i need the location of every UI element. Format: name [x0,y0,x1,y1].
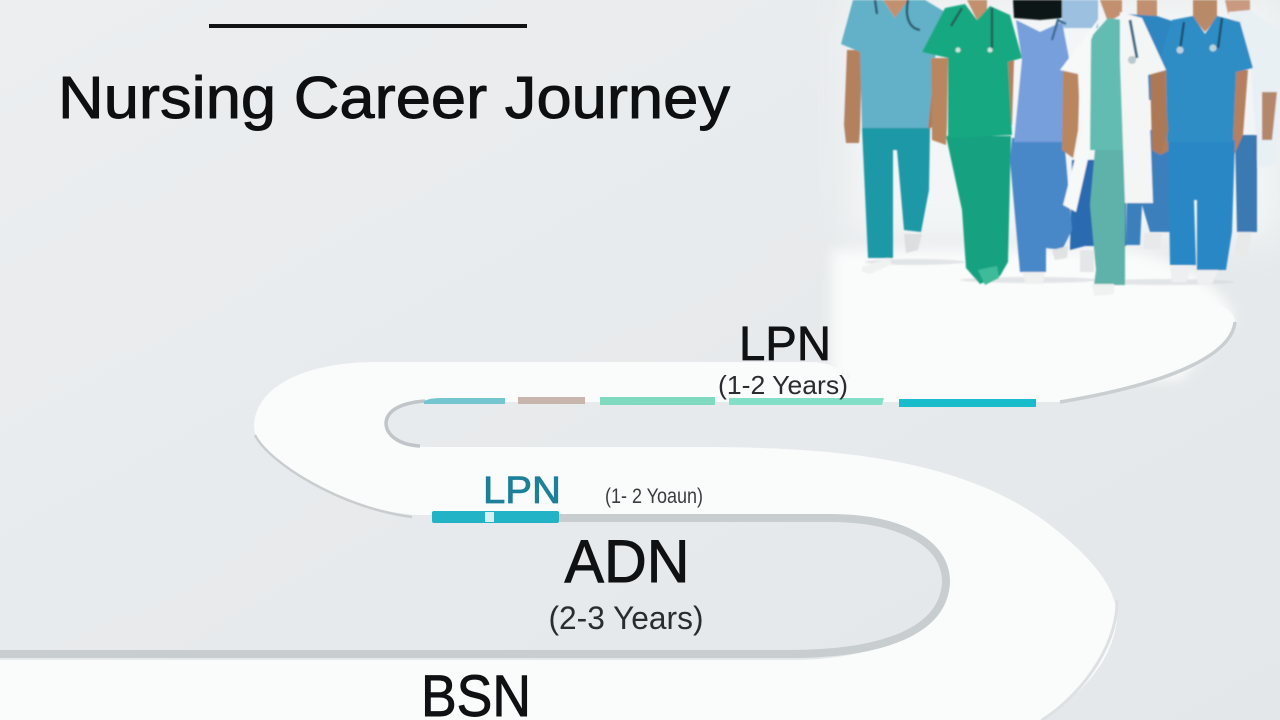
label: ADN years: (2-3 Years) [548,600,704,636]
label: LPN years: (1-2 Years) [718,370,848,400]
label: LPN main: LPN [739,318,831,371]
title: Nursing Career Journey [58,65,731,131]
person: light teal scrubs [841,0,945,274]
road inner edge shadow: upper left bend [386,401,425,446]
top rule [209,24,527,28]
person: blue scrubs front right [1160,0,1253,284]
person: green scrubs [922,0,1022,285]
progress dash: lower track [432,511,559,523]
nursing team illustration [841,0,1280,296]
progress dashes: upper track [424,397,1036,407]
label: LPN teal: LPN [483,470,561,512]
label: small years: (1- 2 Yoaun) [605,485,703,508]
person: back scrubs behind doctor [1062,0,1098,28]
glow behind team [850,0,1280,240]
label: ADN: ADN [564,528,690,595]
person: back right in white coat [1225,0,1280,256]
road inner edge shadow: middle bend [0,518,946,654]
person: back centre in blue [1070,0,1175,272]
road right edge shadow [1042,600,1117,720]
person: doctor in white coat [1060,0,1168,296]
road inner edge shadow: upper right [1060,322,1235,402]
soft floor under team [832,250,1234,380]
ground shadows [865,259,1235,285]
person: periwinkle scrubs [1010,0,1075,284]
road outer edge shadow: left bend [255,435,412,517]
